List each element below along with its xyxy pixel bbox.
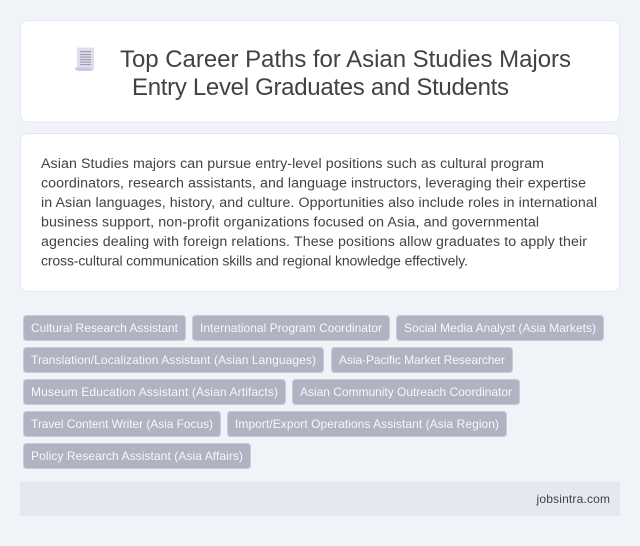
title <box>120 46 571 101</box>
tag <box>396 316 604 340</box>
text block: description <box>41 156 597 268</box>
tags: career paths <box>24 316 604 468</box>
tag <box>228 412 506 436</box>
tag: Asian Community Outreach Coordinator <box>300 385 512 399</box>
tag: International Program Coordinator <box>200 321 382 335</box>
tag: Translation/Localization Assistant (Asian Languages) <box>31 353 316 367</box>
footer credit: jobsintra.com <box>536 492 610 506</box>
tag <box>192 316 390 340</box>
tag: Social Media Analyst (Asia Markets) <box>404 321 596 335</box>
title: Top Career Paths for Asian Studies Majors <box>120 46 571 73</box>
tag: Cultural Research Assistant <box>31 321 179 335</box>
tag <box>332 348 512 372</box>
panel: header <box>20 20 620 122</box>
tag <box>292 380 520 404</box>
tag <box>24 380 286 404</box>
tag <box>24 348 324 372</box>
text block: description: agencies dealing with foreign relations. These positions allow graduates to apply their <box>41 234 587 250</box>
tag: Policy Research Assistant (Asia Affairs) <box>31 449 243 463</box>
tag: Museum Education Assistant (Asian Artifacts) <box>31 385 278 399</box>
text block: description: coordinators, research assistants, and language instructors, leveraging their expertise <box>41 176 586 192</box>
panel: description <box>20 134 620 292</box>
title: Entry Level Graduates and Students <box>132 74 509 101</box>
tag <box>24 412 220 436</box>
icon: document scroll <box>75 48 94 71</box>
footer <box>20 482 620 516</box>
text block: description: Asian Studies majors can pursue entry-level positions such as cultural program <box>41 156 544 172</box>
tag: Import/Export Operations Assistant (Asia Region) <box>235 417 499 431</box>
text block: description: in Asian languages, history, and culture. Opportunities also include roles in international <box>41 195 597 211</box>
text block: description: cross-cultural communication skills and regional knowledge effectively. <box>41 252 468 268</box>
tag <box>24 444 250 468</box>
text block: description: business support, non-profit organizations focused on Asia, and governmental <box>41 214 539 230</box>
tag <box>24 316 186 340</box>
tag: Travel Content Writer (Asia Focus) <box>31 417 213 431</box>
tag: Asia-Pacific Market Researcher <box>339 353 505 367</box>
